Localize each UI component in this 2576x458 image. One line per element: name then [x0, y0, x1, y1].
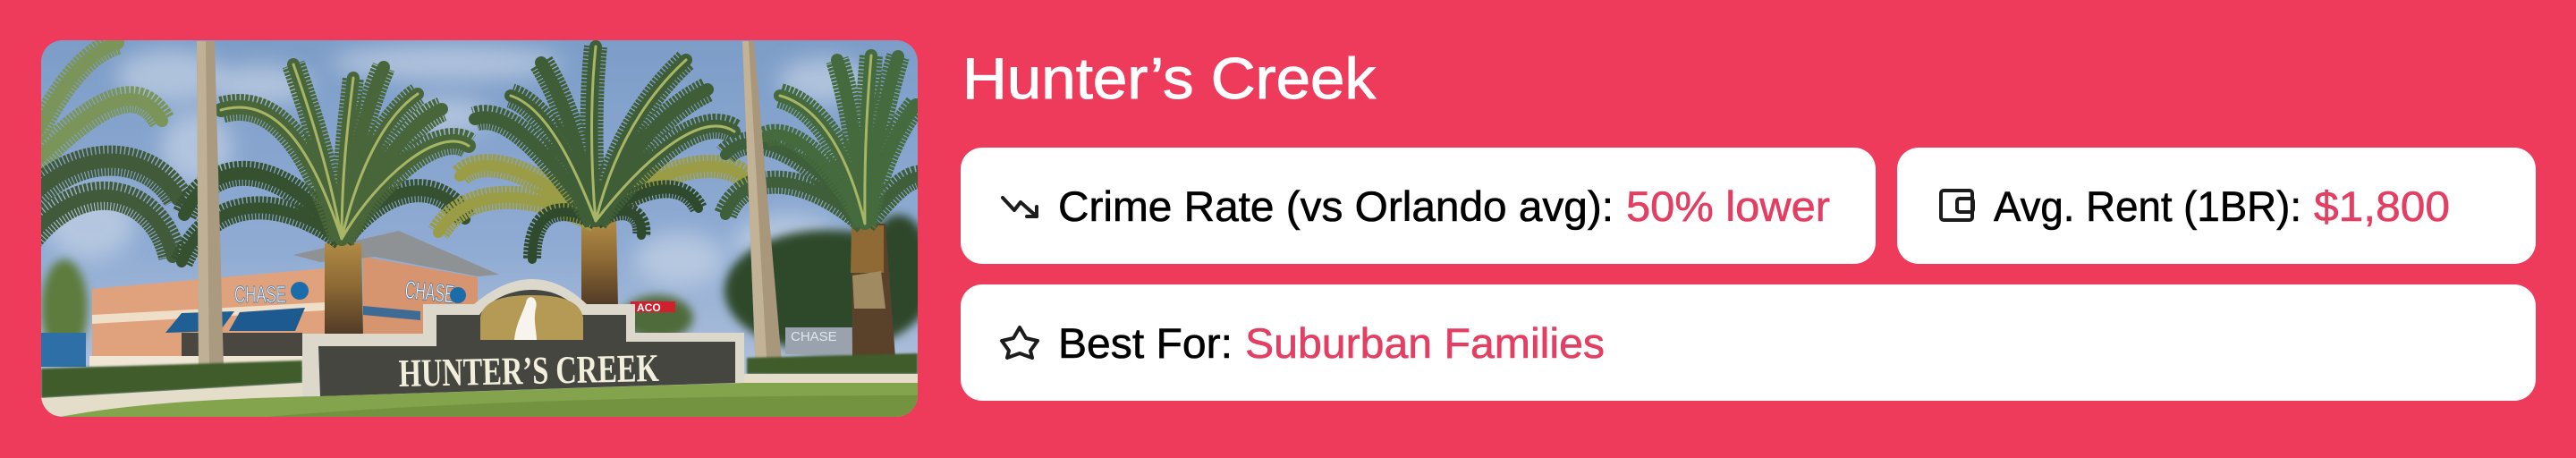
photo: Hunter's Creek entrance sign with palms — [27, 40, 930, 417]
text: average rent value: Avg. Rent (1BR): — [1994, 182, 2301, 230]
panel: best for — [961, 284, 2536, 401]
text: sign lettering: HUNTER’S CREEK — [398, 346, 659, 395]
palm fronds: left palm — [27, 43, 178, 257]
icon: wallet — [1941, 191, 1973, 220]
entrance monument sign — [302, 279, 744, 396]
text: gas station sign: ACO — [637, 301, 661, 314]
curb — [41, 383, 302, 416]
palm fronds: right palm — [725, 55, 930, 224]
palm trunks — [325, 221, 895, 358]
tall palm trunks — [197, 41, 783, 373]
text: average rent value: $1,800 — [2314, 182, 2450, 230]
icon: star — [1002, 327, 1038, 358]
text: best for value: Best For: — [1058, 319, 1233, 367]
panel: average rent — [1897, 148, 2536, 264]
icon: trending down — [1003, 198, 1037, 216]
text: Chase sign on wall: CHASE — [234, 281, 286, 308]
text: crime rate value: Crime Rate (vs Orlando avg): — [1058, 182, 1614, 230]
grass — [61, 383, 918, 417]
text: best for value: Suburban Families — [1245, 319, 1605, 367]
palm fronds: centre-left palm — [182, 64, 469, 262]
panel: crime rate — [961, 148, 1876, 264]
text: Chase sign on side wall: CHASE — [403, 276, 455, 309]
title: Hunter’s Creek — [962, 46, 1377, 111]
hedges — [41, 353, 918, 398]
text: crime rate value: 50% lower — [1626, 182, 1830, 230]
palm fronds: centre palm — [438, 47, 750, 259]
text: Chase roadside sign: CHASE — [791, 329, 837, 344]
